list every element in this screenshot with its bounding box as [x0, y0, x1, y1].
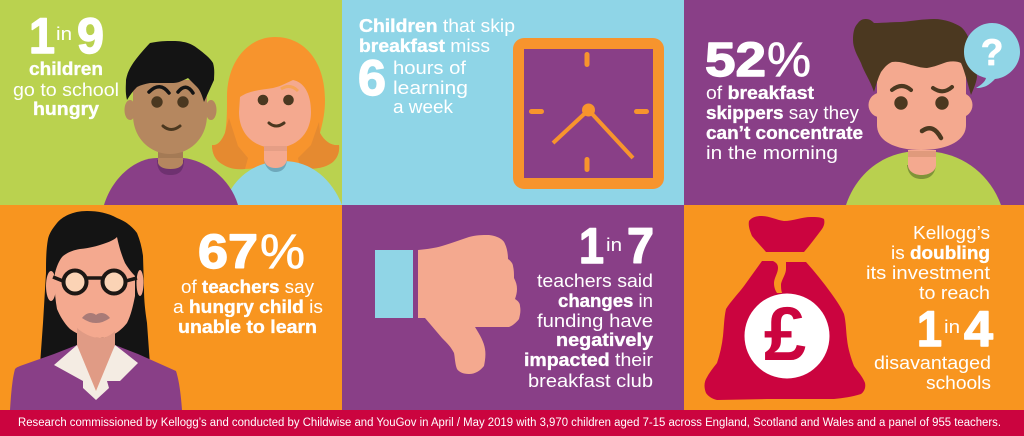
text: teachers said: teachers said: [537, 270, 653, 291]
panel: 1 in 9 children: [0, 0, 342, 205]
text: hours of learning a week: learning: [393, 77, 468, 98]
text: breakfast skippers: skippers say they: [706, 102, 860, 123]
text: teachers say: a hungry child is: [173, 296, 323, 317]
text: disavantaged schools: [874, 352, 991, 393]
stat: 67%: %: [260, 226, 305, 279]
text: disavantaged schools: schools: [926, 372, 991, 393]
text: children go to school hungry: hungry: [33, 99, 99, 119]
icon: clock: [513, 38, 664, 189]
stat: 1 in 9: [29, 8, 104, 64]
text: teachers say: [173, 276, 323, 337]
footer: research note: [0, 410, 1024, 436]
icon: money bag: £: [764, 292, 806, 377]
text: Kellogg's is doubling: Kellogg’s: [913, 222, 990, 243]
stat: 1 in 7: 1: [579, 218, 604, 274]
text: teachers said: funding have: [537, 310, 653, 331]
text: teachers say: of teachers say: [181, 276, 315, 297]
text: teachers said: impacted their: [524, 349, 653, 370]
panel: 6 hours of learning: [342, 0, 684, 205]
stat: 6: 6: [358, 50, 386, 106]
teacher illustration: [10, 211, 182, 410]
text: children that skip breakfast miss: Children that skip: [359, 15, 515, 36]
stat: 1 in 7: [579, 218, 654, 274]
icon: thumbs down: [375, 235, 520, 374]
text: children go to school hungry: go to school: [13, 80, 119, 100]
stat: 1 in 9: in: [56, 24, 72, 44]
man illustration: [846, 19, 1001, 205]
panel: Kellogg's doubling investment: [684, 205, 1024, 410]
girl illustration: [212, 37, 342, 205]
panel: 1 in 7 teachers: [342, 205, 684, 410]
text: Kellogg's is doubling: its investment: [866, 262, 990, 283]
stat: 52%: [705, 34, 811, 87]
stat: 67%: [198, 226, 305, 279]
text: teachers said: negatively: [556, 329, 654, 350]
text: teachers say: unable to learn: [178, 316, 317, 337]
text: Kellogg's is doubling: to reach: [919, 282, 990, 303]
text: children go to school hungry: children: [29, 59, 103, 79]
text: children that skip breakfast miss: [359, 15, 515, 56]
text: breakfast skippers: [706, 82, 863, 163]
panel: 67% of teachers: [0, 205, 342, 410]
stat: 1 in 4: [917, 301, 993, 357]
text: children that skip breakfast miss: breakfast miss: [359, 35, 490, 56]
boy illustration: [104, 41, 238, 205]
text: Kellogg's is doubling: is doubling: [891, 242, 990, 263]
text: hours of learning a week: [393, 57, 468, 117]
stat: 1 in 9: 9: [77, 8, 104, 64]
text: Kellogg's is doubling: [866, 222, 990, 303]
text: teachers said: changes in: [558, 290, 653, 311]
stat: 1 in 9: 1: [29, 8, 55, 64]
text: breakfast skippers: of breakfast: [706, 82, 814, 103]
text: disavantaged schools: disavantaged: [874, 352, 991, 373]
stat: 1 in 4: in: [944, 317, 960, 337]
stat: 1 in 4: 4: [964, 301, 993, 357]
icon: question speech bubble: [964, 23, 1020, 88]
panel: 52% can't concentrate: [684, 0, 1024, 205]
stat: 1 in 7: 7: [627, 218, 654, 274]
icon: question speech bubble: ?: [981, 32, 1003, 73]
stat: 67%: 67: [198, 226, 258, 279]
text: teachers said: [524, 270, 654, 391]
text: breakfast skippers: in the morning: [706, 142, 838, 163]
text: breakfast skippers: can’t concentrate: [706, 122, 863, 143]
stat: 1 in 7: in: [606, 235, 622, 255]
text: hours of learning a week: a week: [393, 96, 454, 117]
text: teachers said: breakfast club: [528, 370, 653, 391]
stat: 52%: 52: [705, 34, 766, 87]
stat: 1 in 4: 1: [917, 301, 942, 357]
text: children go to school hungry: [13, 59, 119, 119]
text: hours of learning a week: hours of: [393, 57, 467, 78]
stat: 52%: %: [767, 34, 811, 87]
icon: money bag: [704, 216, 865, 400]
footer: research note: Research commissioned by Kellogg’s and conducted by Childwise and YouGov in April / May 2019 with 3,970 children aged 7-15 across England, Scotland and Wales and a panel of 955 teachers.: [18, 417, 1001, 429]
